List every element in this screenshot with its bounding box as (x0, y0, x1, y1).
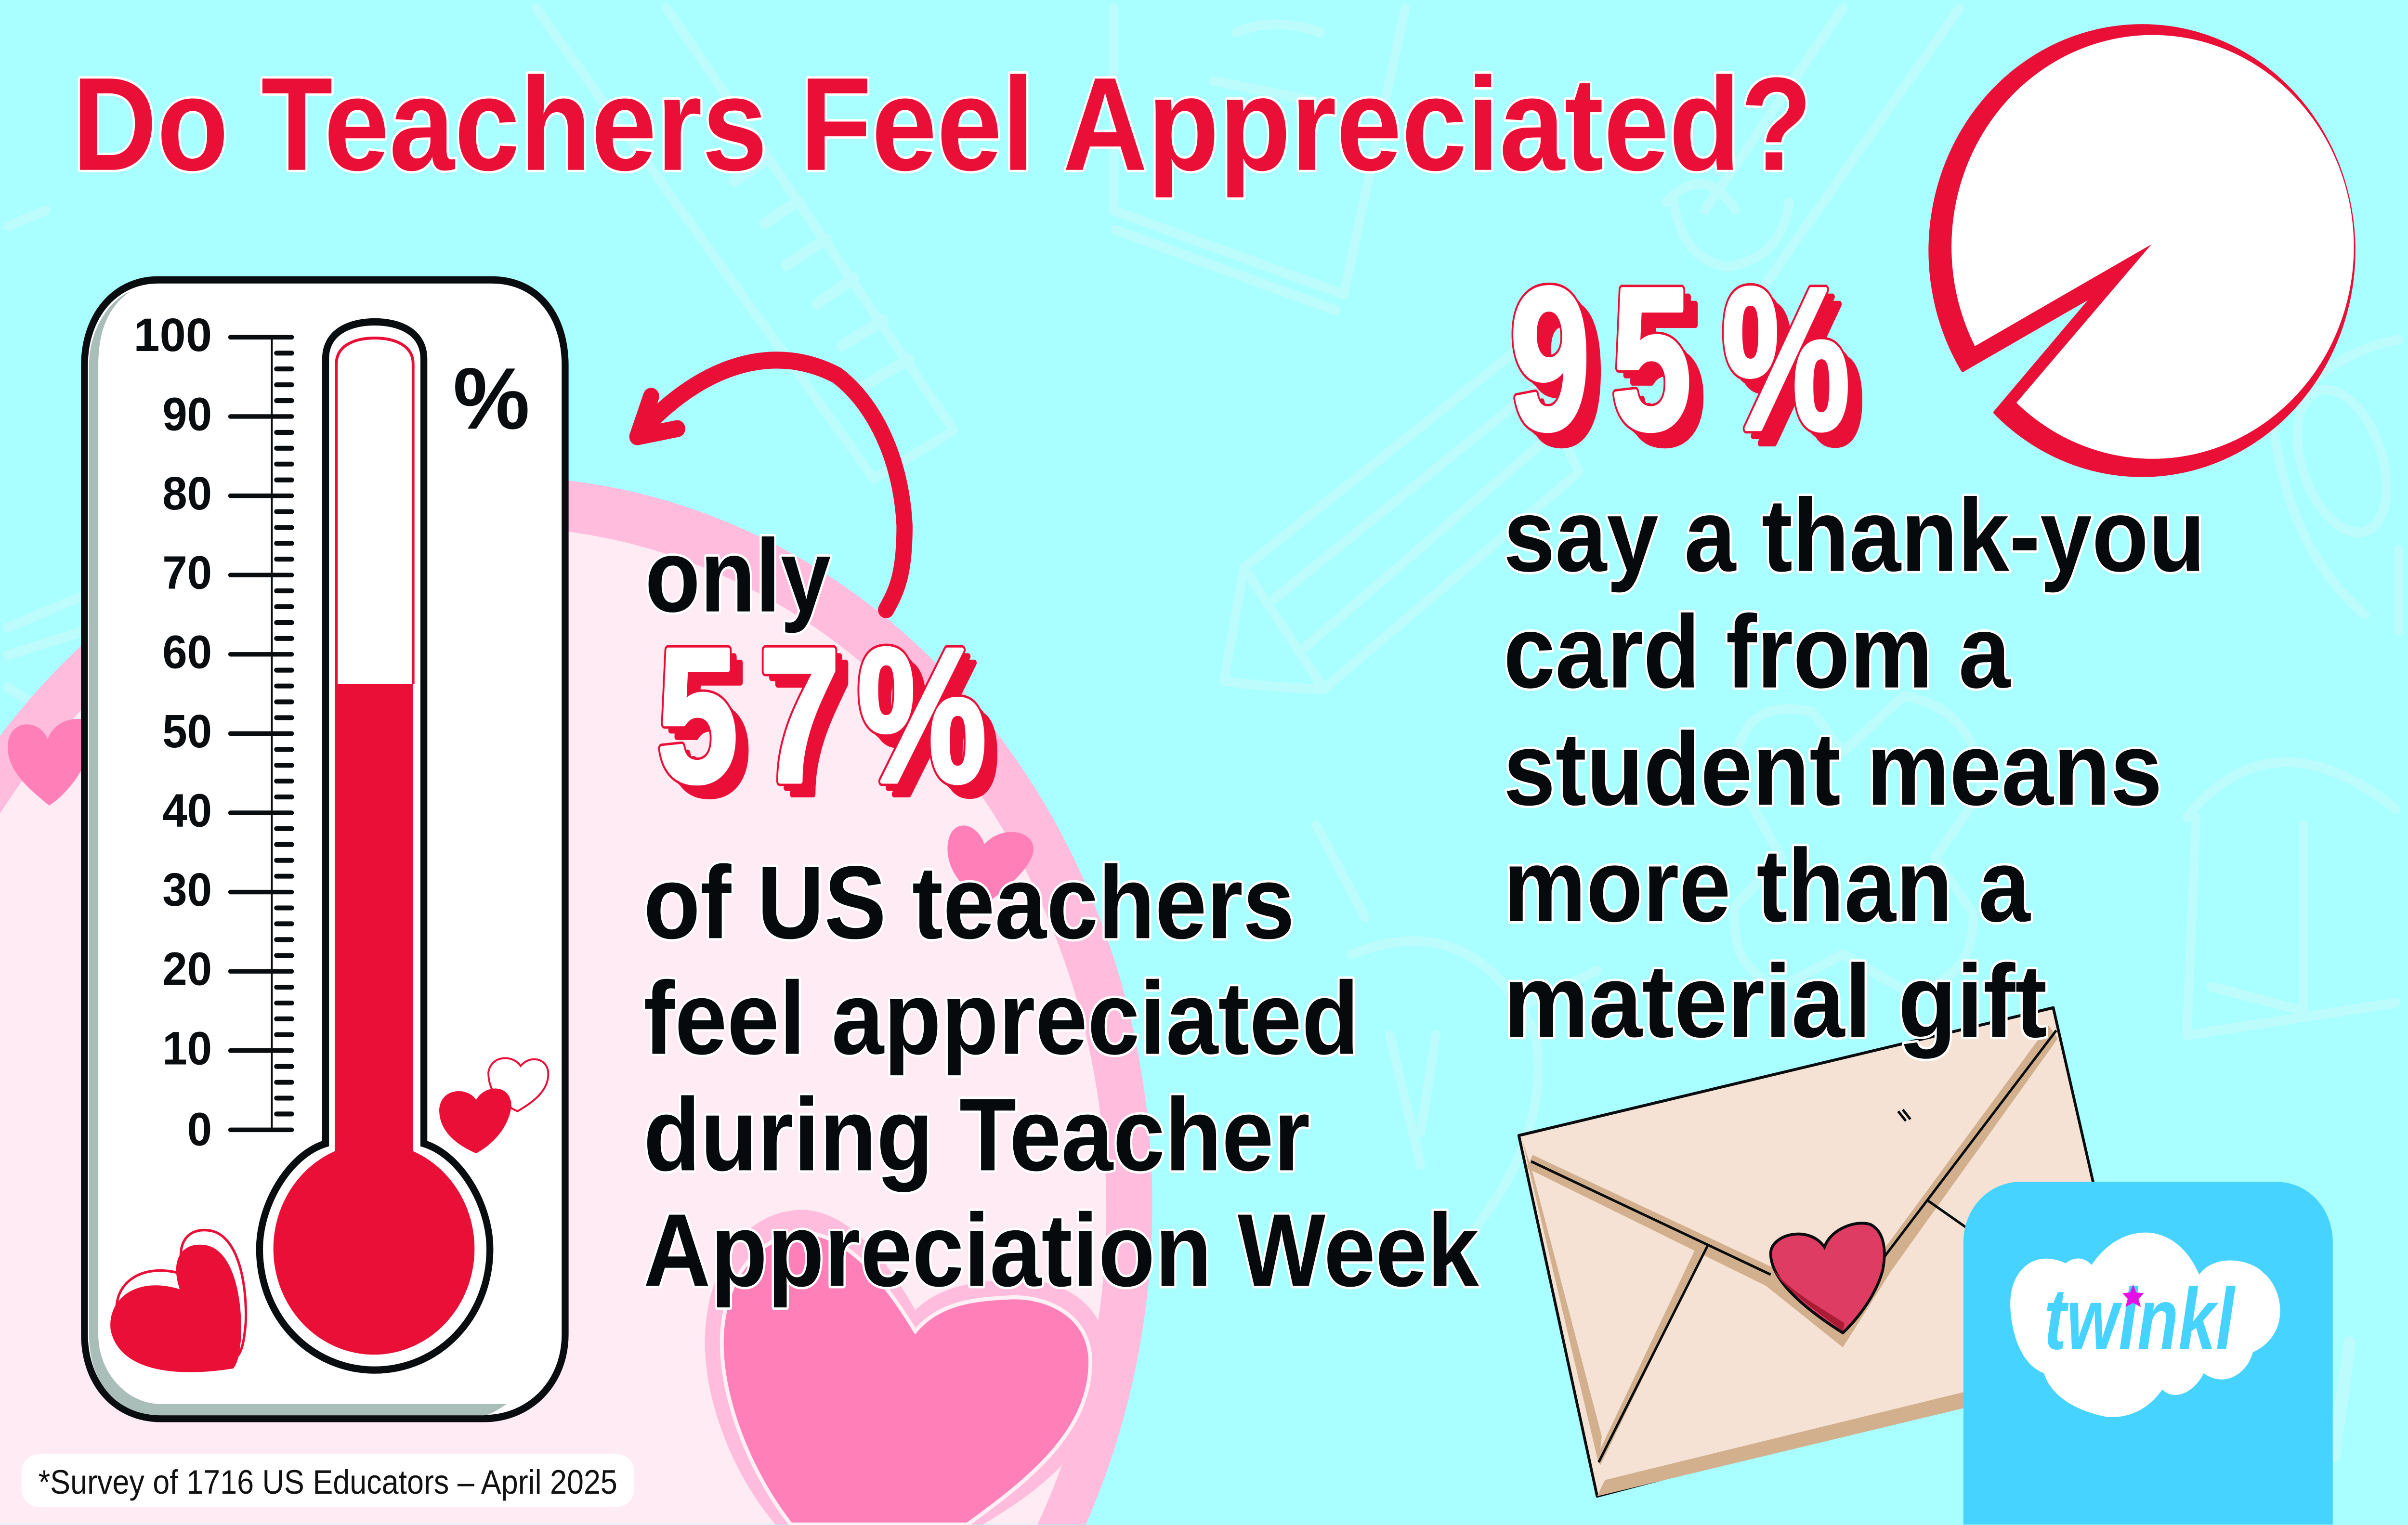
decorative heart: large bottom (705, 1210, 1107, 1525)
scale numbers: 20 (162, 943, 212, 995)
logo tile (1963, 1182, 2333, 1525)
scale ticks (230, 337, 292, 1130)
survey footnote (22, 1454, 634, 1507)
decorative heart: left (8, 719, 86, 806)
stat: 57%: 57% (657, 608, 986, 822)
text: of US teachers: during Teacher (643, 1077, 1310, 1192)
text: thank-you card: card from a (1504, 594, 2011, 710)
scale numbers: 100 (133, 309, 212, 361)
scale numbers: 80 (162, 468, 212, 520)
hearts inside thermometer (110, 1058, 548, 1372)
twinkl logo (1963, 1182, 2333, 1525)
text: of US teachers: of US teachers (643, 845, 1295, 960)
thermometer panel (84, 280, 565, 1419)
pink background circle (0, 477, 1152, 1525)
scale numbers: 40 (162, 784, 212, 837)
stat: 57%: 57% (669, 621, 999, 835)
scale numbers: 90 (162, 388, 212, 441)
text: of US teachers: Appreciation Week (643, 1193, 1479, 1308)
scale numbers: 0 (187, 1103, 212, 1156)
scale numbers (133, 309, 212, 1156)
text: thank-you card: say a thank-you (1504, 478, 2205, 593)
tube and bulb outline (260, 322, 490, 1370)
scale numbers: 70 (162, 547, 212, 599)
text: thank-you card (1504, 478, 2205, 1059)
envelope flap lines (1531, 1030, 2056, 1462)
envelope body (1519, 1008, 2150, 1496)
text: only: only (645, 518, 831, 634)
stat: 57%: 57% (657, 608, 986, 822)
mercury at 57 percent (274, 338, 474, 1355)
stat: 95%: 95% (1510, 246, 1850, 472)
survey footnote: *Survey of 1716 US Educators – April 2025 (39, 1463, 617, 1501)
logo wordmark: twinkl (2044, 1270, 2236, 1368)
stat: 95%: 95% (1517, 253, 1857, 479)
panel body (84, 280, 565, 1419)
stat: 95%: 95% (1524, 261, 1864, 486)
decorative heart: small centre (947, 825, 1034, 902)
panel shadow (89, 291, 507, 1415)
red curved arrow (637, 360, 904, 610)
envelope tan bands (1522, 1139, 1981, 1496)
scale numbers: 10 (162, 1022, 212, 1075)
text: thank-you card: material gift (1504, 943, 2047, 1059)
heart seal (1771, 1223, 1885, 1333)
percent sign: % (453, 350, 530, 447)
text: thank-you card: more than a (1504, 828, 2031, 943)
scale numbers: 50 (162, 705, 212, 757)
main heading: Do Teachers Feel Appreciated? (72, 50, 1812, 199)
scale numbers: 60 (162, 626, 212, 678)
scale numbers: 30 (162, 864, 212, 916)
text: of US teachers: feel appreciated (643, 961, 1359, 1076)
stat: 95%: 95% (1510, 246, 1850, 472)
envelope illustration (1519, 1008, 2150, 1496)
stat: 57%: 57% (664, 615, 993, 828)
logo star (2122, 1284, 2144, 1307)
text: thank-you card: student means (1504, 711, 2162, 827)
text: of US teachers (643, 845, 1479, 1308)
pie chart 95 percent (1930, 26, 2354, 475)
logo cloud (2010, 1233, 2280, 1417)
envelope flap shadow (1527, 1026, 2058, 1347)
